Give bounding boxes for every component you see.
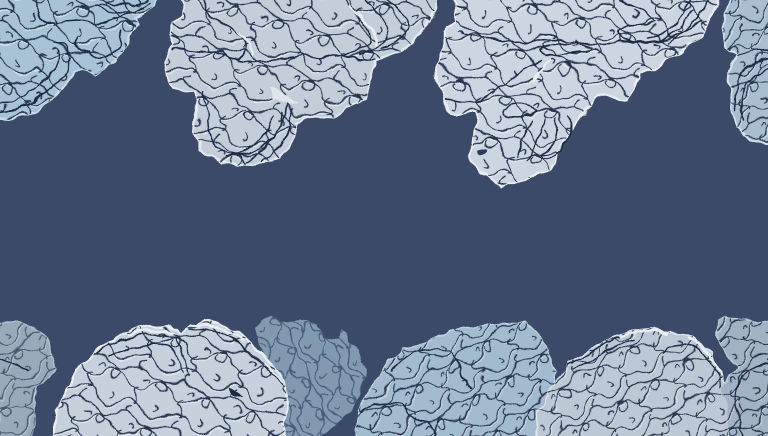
brain: top centre left <box>165 0 441 165</box>
brain: bottom left edge <box>0 322 56 436</box>
brain: bottom centre right <box>535 328 734 436</box>
brain: bottom rear grey-blue <box>256 316 366 436</box>
brain: top centre right <box>436 0 721 187</box>
brain: bottom main <box>55 321 286 436</box>
brain: top right edge <box>722 0 768 143</box>
brain: bottom right edge <box>716 318 768 436</box>
brain: bottom centre blue <box>355 322 556 436</box>
brain: top left <box>0 0 160 118</box>
